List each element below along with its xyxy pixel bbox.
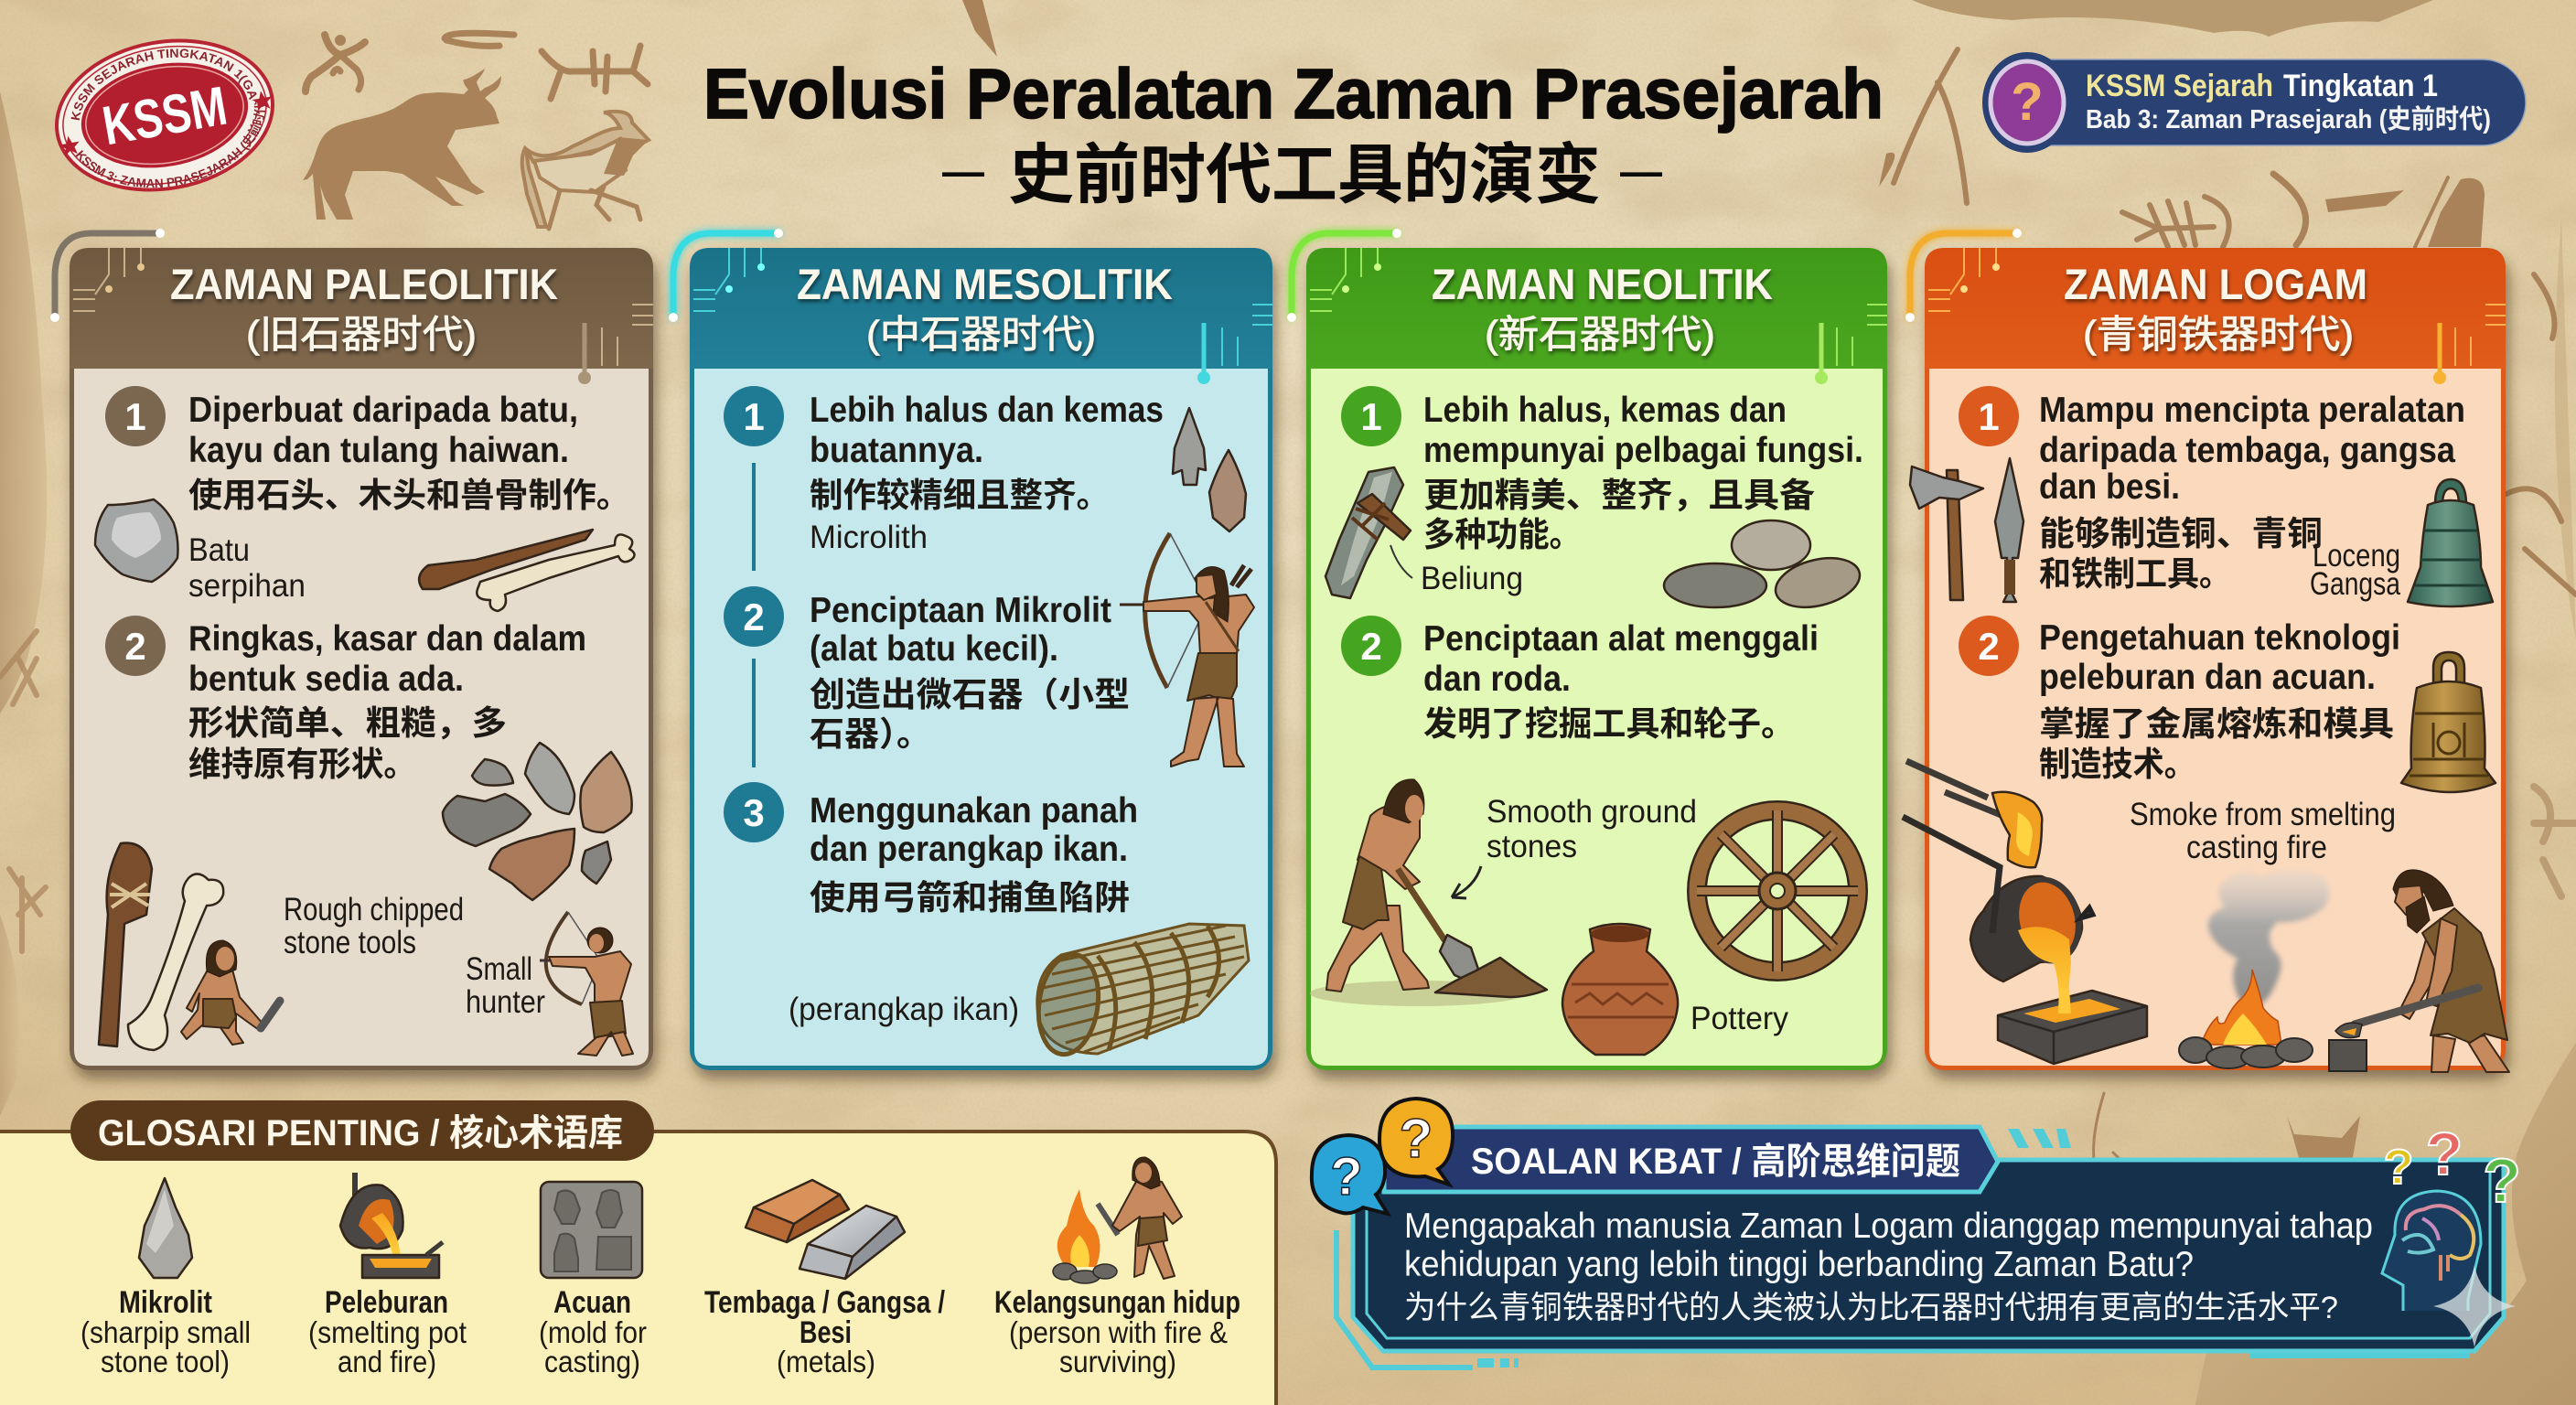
title: — <box>942 147 984 195</box>
icon: head with brain and question marks: ? <box>2483 1146 2521 1216</box>
glossary item: Tembaga / Gangsa / Besi: Tembaga / Gangsa / <box>704 1285 945 1320</box>
point 1 text: 1 <box>743 395 765 438</box>
point 2 text: 2 <box>743 595 765 638</box>
KBAT question panel <box>1312 1099 2521 1367</box>
point 1 text: 1 <box>124 395 146 438</box>
label: small hunter <box>466 951 545 1020</box>
badge: KSSM Sejarah Tingkatan 1: ? <box>2011 72 2044 132</box>
label: Batu serpihan: Batu <box>188 532 250 568</box>
title: Evolusi Peralatan Zaman Prasejarah <box>703 55 1884 134</box>
label: loceng gangsa: Loceng <box>2313 538 2400 574</box>
point 1 text: dan besi. <box>2039 467 2180 507</box>
glossary heading pill: GLOSARI PENTING / 核心术语库 <box>98 1113 623 1153</box>
point 2 text: (alat batu kecil). <box>810 629 1058 669</box>
glossary item: Kelangsungan hidup: (person with fire & <box>1009 1315 1228 1349</box>
point 1 text: Lebih halus, kemas dan <box>1423 391 1787 430</box>
point 2 text: 2 <box>124 625 146 668</box>
KBAT question text: Mengapakah manusia Zaman Logam dianggap mempunyai tahap <box>1404 1207 2373 1246</box>
point 2 text: peleburan dan acuan. <box>2039 658 2376 697</box>
icon: metal axe and spear <box>1910 458 2023 602</box>
point 1 text: daripada tembaga, gangsa <box>2039 431 2455 470</box>
label: small hunter: hunter <box>466 984 545 1020</box>
icon: golden bronze bell <box>2401 652 2496 792</box>
arrow: to the digging tool <box>1452 866 1481 898</box>
header: Zaman Neolitik <box>1306 248 1887 369</box>
glossary item: Mikrolit: (sharpip small <box>80 1315 251 1349</box>
title <box>703 55 1884 212</box>
point 2 text: 石器）。 <box>810 715 931 753</box>
point 1 text <box>1341 386 1863 553</box>
label: small hunter: Small <box>466 951 532 987</box>
icon: tongs and crucible pouring <box>1906 761 2042 867</box>
glossary item: Peleburan: (smelting pot <box>308 1315 467 1349</box>
glossary item: Kelangsungan hidup <box>994 1157 1240 1378</box>
icon: beliung polished adze <box>1326 467 1412 598</box>
glossary item: Acuan: Acuan <box>553 1285 631 1320</box>
icon: bearded smith with tool <box>2329 870 2509 1072</box>
header: Zaman Logam: ZAMAN LOGAM <box>2064 260 2367 308</box>
header: Zaman Logam: (青铜铁器时代) <box>2083 313 2354 356</box>
header: Zaman Mesolitik: ZAMAN MESOLITIK <box>797 260 1173 308</box>
labels: rough chipped stone tools: Rough chipped <box>284 892 464 928</box>
point 2 text: 制造技术。 <box>2039 745 2195 783</box>
icon: soil mound <box>1435 958 1547 997</box>
header: Zaman Neolitik: (新石器时代) <box>1485 313 1715 356</box>
icon: head with brain and question marks: ? <box>2426 1120 2463 1187</box>
icon: orange speech bubble with question mark <box>1379 1099 1453 1185</box>
point 3 text <box>724 782 1138 917</box>
glossary item: Kelangsungan hidup: Kelangsungan hidup <box>994 1285 1240 1320</box>
point 1 text <box>1959 386 2465 593</box>
circuit arcs above the panels <box>50 229 2022 322</box>
label: smoke from smelting casting fire: casting fire <box>2186 830 2327 865</box>
title: — <box>1620 147 1662 195</box>
icon: wooden wheel <box>1697 810 1858 971</box>
icon: archer with bow <box>1120 533 1254 767</box>
icon: club and long bone <box>99 843 223 1050</box>
point 2 text: dan roda. <box>1423 660 1571 699</box>
glossary heading pill <box>70 1100 654 1161</box>
title: 史前时代工具的演变 <box>1008 139 1601 212</box>
header: Zaman Paleolitik: ZAMAN PALEOLITIK <box>170 260 558 308</box>
header: Zaman Logam <box>1925 248 2506 369</box>
point 1 text: 更加精美、整齐，且具备 <box>1423 477 1815 514</box>
point 1 text: Mampu mencipta peralatan <box>2039 391 2465 430</box>
point 1 text: buatannya. <box>810 431 983 470</box>
icon: smooth stones <box>1664 520 1865 616</box>
panel: Zaman Neolitik <box>1306 248 1887 1070</box>
glossary item: Mikrolit: Mikrolit <box>119 1285 212 1320</box>
point 1 text: Microlith <box>810 520 928 555</box>
icon: clay pot <box>1562 924 1678 1055</box>
point 3 text: 3 <box>743 791 765 834</box>
point 1 text: 1 <box>1978 395 2000 438</box>
KBAT question text <box>1404 1207 2373 1325</box>
icon: blue speech bubble with question mark <box>1312 1135 1388 1214</box>
point 2 text: bentuk sedia ada. <box>188 660 464 699</box>
icon: man digging with shovel <box>1310 779 1526 1006</box>
glossary item: Mikrolit: stone tool) <box>101 1345 230 1378</box>
icon: green bronze bell <box>2408 479 2493 606</box>
point 1 text: 使用石头、木头和兽骨制作。 <box>188 477 630 514</box>
glossary item: Tembaga / Gangsa / Besi: (metals) <box>777 1345 875 1378</box>
header: Zaman Paleolitik: (旧石器时代) <box>246 313 477 356</box>
point 1 text: Diperbuat daripada batu, <box>188 391 578 430</box>
label: smoke from smelting casting fire: Smoke from smelting <box>2130 797 2396 832</box>
labels: rough chipped stone tools <box>284 892 464 960</box>
label: loceng gangsa: Gangsa <box>2310 566 2400 602</box>
badge: KSSM Sejarah Tingkatan 1: KSSM Sejarah <box>2086 69 2273 103</box>
glossary item: Peleburan: and fire) <box>338 1345 436 1378</box>
label: smoke from smelting casting fire <box>2130 797 2396 865</box>
label: Batu serpihan: serpihan <box>188 568 306 604</box>
icon: blue speech bubble with question mark: ? <box>1330 1147 1363 1207</box>
cave painting: human figure <box>306 35 365 91</box>
icon: small person with stone club <box>181 940 280 1045</box>
icon: smelting pot pouring into mold <box>1903 817 2147 1064</box>
point 2 text: 2 <box>1978 625 2000 668</box>
point 1 text <box>724 386 1164 555</box>
stamp: KSSM logo: KSSM 3: ZAMAN PRASEJARAH (史前时代) <box>75 102 265 188</box>
KBAT heading tab: SOALAN KBAT / 高阶思维问题 <box>1471 1142 1960 1182</box>
panel: Zaman Logam <box>1903 248 2509 1072</box>
point 1 text: 和铁制工具。 <box>2039 555 2231 593</box>
KBAT heading tab <box>1384 1127 1998 1192</box>
icon: smoke and campfire <box>2179 871 2329 1068</box>
panel: Zaman Paleolitik <box>70 248 653 1070</box>
header: Zaman Paleolitik <box>70 248 653 369</box>
glossary item: Kelangsungan hidup: surviving) <box>1059 1345 1176 1378</box>
glossary item: Acuan: (mold for <box>539 1315 647 1349</box>
point 2 text: 形状简单、粗糙，多 <box>188 704 507 742</box>
glossary panel <box>0 1100 1276 1405</box>
point 2 text <box>1959 616 2400 783</box>
point 2 text <box>105 616 586 783</box>
point 1 text: 多种功能。 <box>1423 516 1581 553</box>
glossary item: Acuan: casting) <box>544 1345 640 1378</box>
point 1 text <box>105 386 630 514</box>
icon: microlith arrowheads <box>1173 408 1246 531</box>
header: Zaman Mesolitik: (中石器时代) <box>866 313 1096 356</box>
glossary item: Peleburan <box>308 1173 467 1378</box>
icon: head with brain and question marks <box>2382 1120 2521 1311</box>
point 1 text: 能够制造铜、青铜 <box>2039 515 2323 552</box>
point 3 text: dan perangkap ikan. <box>810 830 1128 869</box>
icon: orange speech bubble with question mark: ? <box>1400 1108 1433 1169</box>
point 2 text <box>724 586 1130 753</box>
labels: rough chipped stone tools: stone tools <box>284 925 416 960</box>
cave paintings: animals and figures at top left <box>303 0 997 229</box>
label: pottery: Pottery <box>1690 1001 1788 1036</box>
KBAT question text: kehidupan yang lebih tinggi berbanding Zaman Batu? <box>1404 1245 2194 1284</box>
point 3 text: Menggunakan panah <box>810 791 1138 831</box>
glossary item: Tembaga / Gangsa / Besi <box>704 1180 945 1378</box>
badge: KSSM Sejarah Tingkatan 1 <box>1982 52 2526 153</box>
label: Beliung: Beliung <box>1421 561 1523 596</box>
point 2 text: Penciptaan alat menggali <box>1423 619 1819 659</box>
label: Batu serpihan <box>188 532 306 604</box>
label: smooth ground stones: Smooth ground <box>1487 794 1697 830</box>
icon: batu serpihan flake stone <box>95 499 177 582</box>
badge: KSSM Sejarah Tingkatan 1: Bab 3: Zaman Prasejarah (史前时代) <box>2086 104 2491 134</box>
label: perangkap ikan: (perangkap ikan) <box>789 992 1019 1027</box>
stamp: KSSM logo <box>55 38 274 192</box>
point 2 text: Ringkas, kasar dan dalam <box>188 619 586 659</box>
point 1 text: kayu dan tulang haiwan. <box>188 431 569 470</box>
point 1 text: Lebih halus dan kemas <box>810 391 1164 430</box>
badge: KSSM Sejarah Tingkatan 1: Tingkatan 1 <box>2283 69 2438 103</box>
glossary item: Tembaga / Gangsa / Besi: Besi <box>800 1315 852 1350</box>
glossary item: Mikrolit <box>80 1178 251 1378</box>
panel: Zaman Mesolitik <box>690 248 1272 1070</box>
glossary item: Peleburan: Peleburan <box>325 1285 448 1320</box>
point 2 text: Penciptaan Mikrolit <box>810 591 1111 630</box>
KBAT question text: 为什么青铜铁器时代的人类被认为比石器时代拥有更高的生活水平? <box>1404 1291 2338 1325</box>
icon: wooden club and bone <box>419 530 635 611</box>
point 1 text: 制作较精细且整齐。 <box>810 477 1110 514</box>
point 2 text: 发明了挖掘工具和轮子。 <box>1423 705 1795 743</box>
point 2 text: Pengetahuan teknologi <box>2039 618 2400 658</box>
icon: head with brain and question marks: ? <box>2384 1140 2413 1195</box>
point 2 text: 维持原有形状。 <box>188 745 416 783</box>
point 1 text: 1 <box>1360 395 1382 438</box>
label: smooth ground stones <box>1487 794 1697 864</box>
icon: woven fish trap <box>1033 924 1249 1058</box>
label: loceng gangsa <box>2310 538 2400 602</box>
point 2 text: 掌握了金属熔炼和模具 <box>2039 705 2394 743</box>
header: Zaman Neolitik: ZAMAN NEOLITIK <box>1432 260 1773 308</box>
point 1 text: mempunyai pelbagai fungsi. <box>1423 431 1863 470</box>
point 3 text: 使用弓箭和捕鱼陷阱 <box>810 879 1130 917</box>
glossary item: Acuan <box>539 1182 647 1378</box>
point 2 text: 创造出微石器（小型 <box>810 676 1130 713</box>
point 2 text: 2 <box>1360 625 1382 668</box>
icon: rough chipped stones <box>443 743 632 900</box>
point 2 text <box>1341 616 1819 743</box>
header: Zaman Mesolitik <box>690 248 1272 369</box>
stamp: KSSM logo: KSSM <box>98 75 231 156</box>
label: smooth ground stones: stones <box>1487 829 1577 864</box>
icon: small hunter with bow <box>540 912 633 1056</box>
